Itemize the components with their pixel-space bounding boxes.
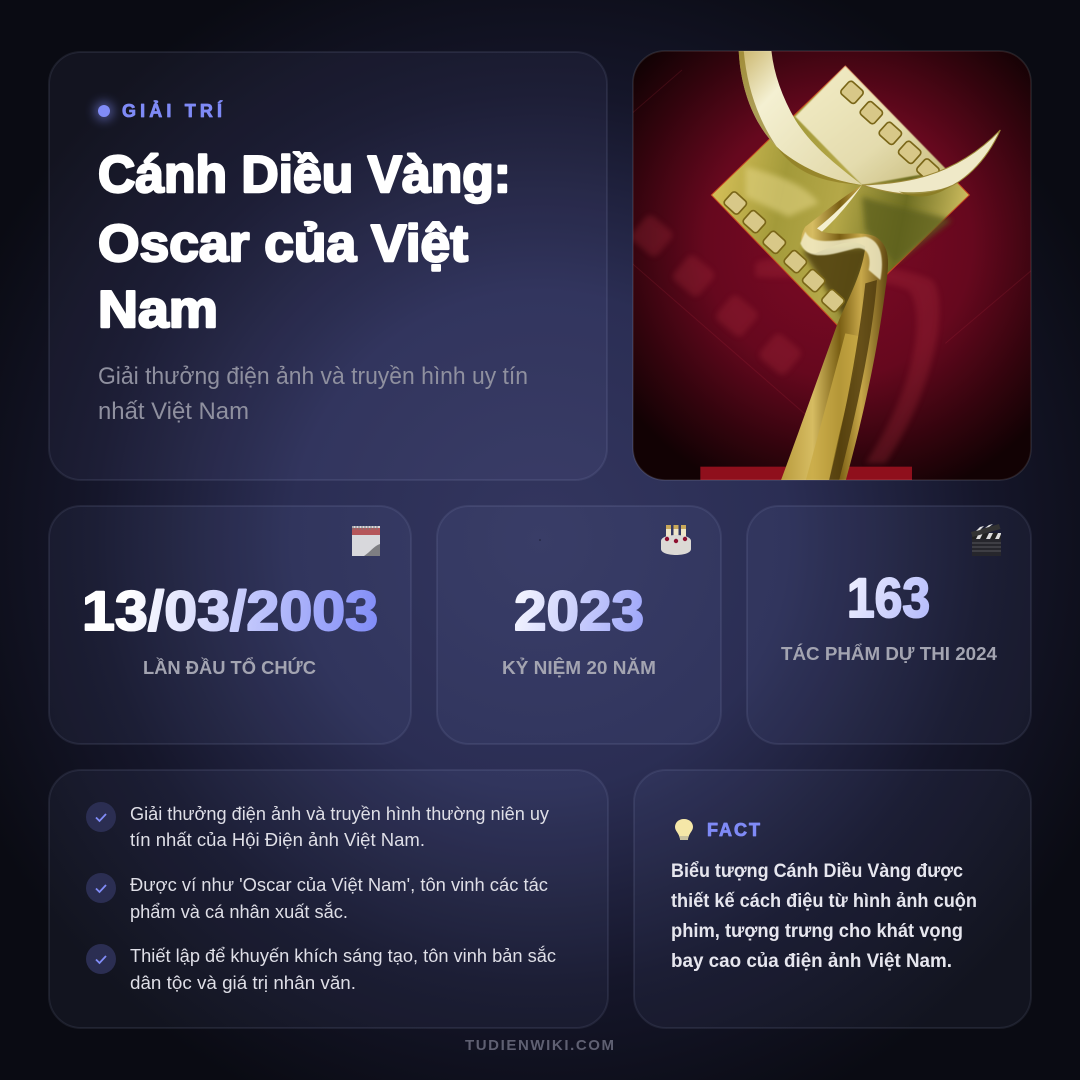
footer credit: TUDIENWIKI.COM bbox=[465, 1037, 614, 1054]
heading bbox=[98, 146, 511, 339]
heading: Nam bbox=[98, 281, 218, 339]
fact text: Biểu tượng Cánh Diều Vàng được bbox=[671, 861, 963, 882]
list item 1: Giải thưởng điện ảnh và truyền hình thường niên uy bbox=[130, 804, 549, 824]
fact text: thiết kế cách điệu từ hình ảnh cuộn bbox=[671, 891, 977, 912]
panel: fact bbox=[634, 770, 1031, 1028]
panel: title card bbox=[49, 52, 607, 480]
panel: trophy image bbox=[629, 50, 1032, 483]
stat value: 13/03/2003 bbox=[82, 579, 378, 642]
heading: Cánh Diều Vàng: bbox=[98, 146, 511, 204]
heading: Oscar của Việt bbox=[98, 215, 468, 273]
fact text: bay cao của điện ảnh Việt Nam. bbox=[671, 951, 952, 972]
list item 1 bbox=[86, 802, 549, 850]
stat value: 2023 bbox=[514, 579, 644, 642]
panel: stat first held bbox=[49, 506, 411, 744]
list item 3: Thiết lập để khuyến khích sáng tạo, tôn vinh bản sắc bbox=[130, 945, 556, 966]
fact text: phim, tượng trưng cho khát vọng bbox=[671, 921, 963, 942]
list item 2: phẩm và cá nhân xuất sắc. bbox=[130, 901, 348, 922]
category tag: GIẢI TRÍ bbox=[122, 100, 223, 121]
list item 2: Được ví như 'Oscar của Việt Nam', tôn vinh các tác bbox=[130, 875, 548, 895]
subtitle: Giải thưởng điện ảnh và truyền hình uy tín bbox=[98, 363, 528, 390]
crescent wings bbox=[739, 50, 862, 185]
panel: stat entries bbox=[747, 506, 1031, 744]
list item 2 bbox=[86, 873, 548, 922]
base bbox=[700, 467, 912, 483]
ghost film backdrop bbox=[629, 213, 939, 463]
fact label: FACT bbox=[707, 820, 760, 840]
icon: calendar bbox=[352, 526, 380, 556]
icon: cake bbox=[661, 525, 691, 555]
subtitle: nhất Việt Nam bbox=[98, 398, 249, 425]
film holes bbox=[723, 80, 941, 313]
list item 3: dân tộc và giá trị nhân văn. bbox=[130, 973, 356, 993]
film diamond bbox=[711, 66, 969, 325]
stat label: KỶ NIỆM 20 NĂM bbox=[502, 657, 656, 678]
subtitle bbox=[98, 363, 528, 425]
fact text bbox=[671, 861, 977, 972]
stat value: 163 bbox=[847, 566, 930, 629]
stat label: TÁC PHẨM DỰ THI 2024 bbox=[781, 643, 997, 664]
panel: key points bbox=[49, 770, 608, 1028]
stat label: LẦN ĐẦU TỔ CHỨC bbox=[143, 657, 316, 678]
icon: clapperboard bbox=[971, 524, 1001, 556]
stem bbox=[780, 185, 888, 482]
list item 3 bbox=[86, 944, 556, 993]
icon: light bulb bbox=[675, 819, 693, 840]
panel: stat anniversary bbox=[437, 506, 721, 744]
list item 1: tín nhất của Hội Điện ảnh Việt Nam. bbox=[130, 830, 425, 850]
